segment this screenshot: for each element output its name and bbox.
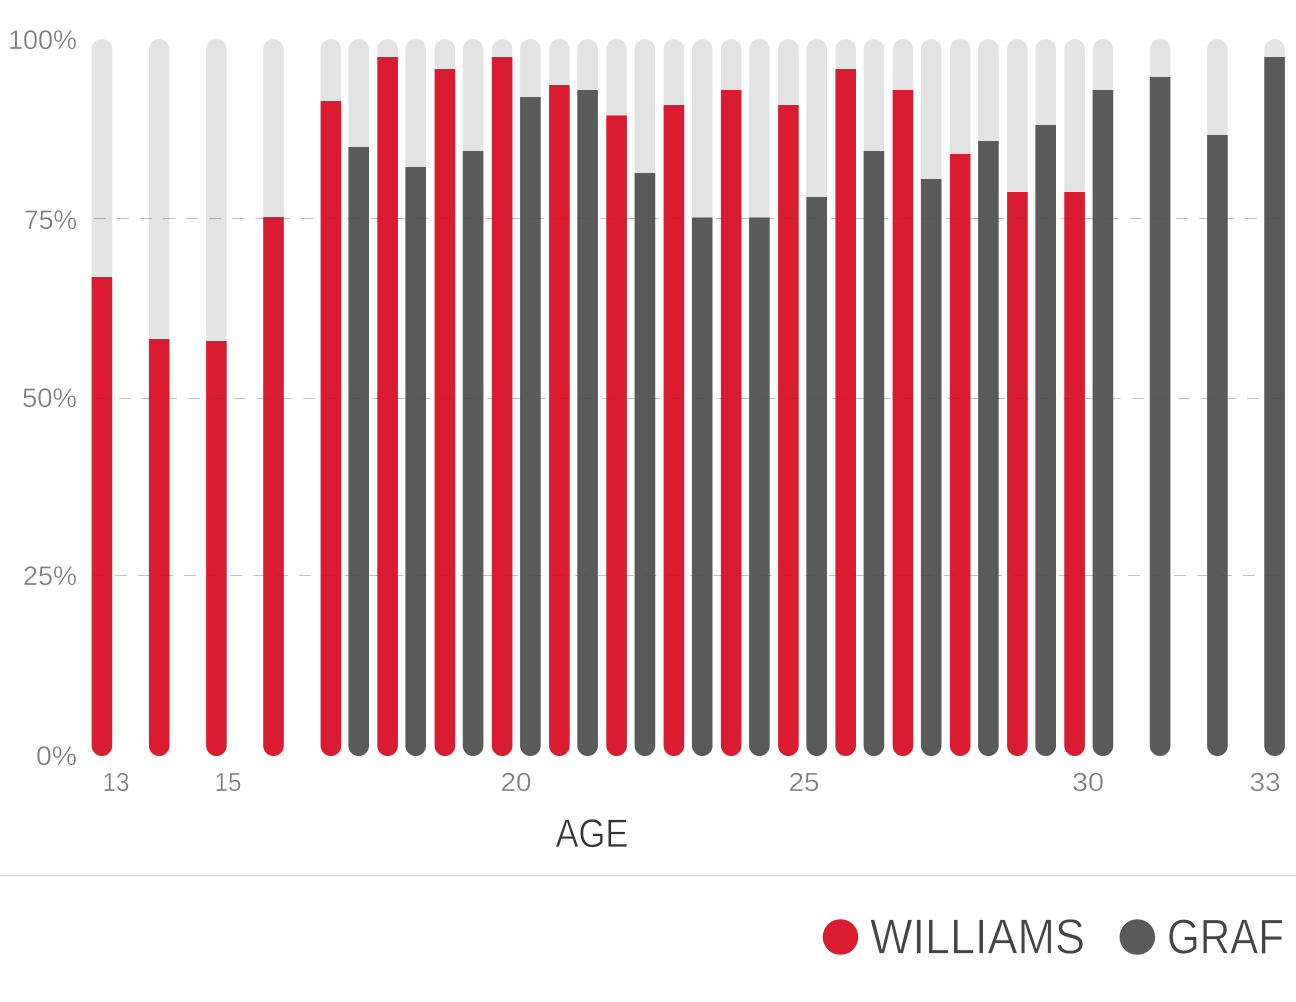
legend: Williams: WILLIAMS — [870, 910, 1085, 964]
y axis labels: 100% — [8, 25, 77, 55]
y axis labels: 50% — [22, 383, 77, 413]
legend — [823, 910, 1284, 964]
y axis labels: 75% — [24, 205, 77, 235]
bar tracks — [92, 39, 1285, 756]
x axis labels: 33 — [1250, 767, 1280, 797]
x axis labels: 15 — [214, 767, 242, 797]
x axis labels: 13 — [102, 767, 130, 797]
x axis labels: 30 — [1072, 767, 1104, 797]
x axis labels: 25 — [788, 767, 820, 797]
Williams bars — [92, 57, 1085, 756]
y axis labels — [8, 25, 77, 771]
x axis labels: 20 — [500, 767, 532, 797]
y axis labels: 0% — [36, 741, 77, 771]
Graf bars — [348, 57, 1285, 756]
axis title: age: AGE — [556, 812, 628, 856]
legend: Graf — [1120, 910, 1284, 964]
y axis labels: 25% — [23, 561, 77, 591]
x axis labels — [102, 767, 1280, 797]
